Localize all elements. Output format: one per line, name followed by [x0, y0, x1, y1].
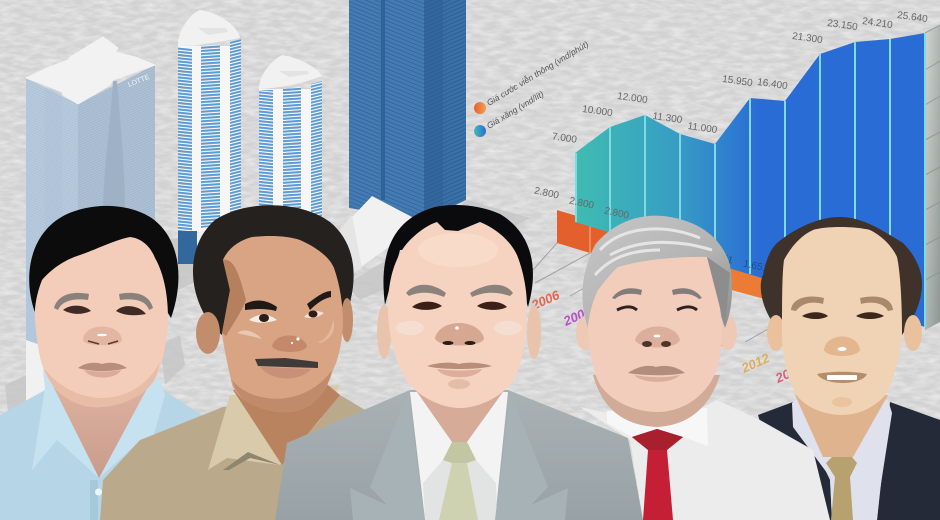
collar [32, 370, 165, 478]
tie [826, 457, 857, 520]
chart year labels: 2012 [738, 350, 772, 376]
chart: petrol price area [575, 33, 925, 327]
eyes [412, 302, 442, 310]
eyes [802, 312, 828, 319]
hair [29, 206, 178, 320]
eyes [617, 307, 637, 310]
person 4: white shirt, red tie [576, 216, 830, 520]
ground shadows of buildings [5, 200, 530, 412]
neck [412, 385, 508, 442]
face [388, 222, 527, 408]
hair [761, 217, 922, 335]
chart value labels: 15.950 [721, 74, 754, 89]
shirt [792, 400, 892, 520]
chart legend: Giá xăng (vnd/lít) [485, 89, 546, 131]
mouth [628, 366, 685, 375]
chart value labels: 2.800 [568, 196, 595, 212]
chart year labels: 2013 [772, 360, 806, 386]
shirt [580, 400, 830, 520]
nose [435, 323, 484, 346]
shirt [410, 392, 508, 520]
neck [593, 375, 720, 427]
building: Lotte tower: LOTTE [127, 74, 151, 89]
face [782, 227, 902, 415]
chart value labels: 1.651 [707, 251, 734, 267]
building: low white podium [26, 340, 60, 402]
chart value labels: 1.651 [742, 259, 769, 275]
chart value labels: 12.000 [616, 91, 649, 106]
chart value labels [533, 10, 929, 275]
hair [582, 216, 732, 328]
chart year labels [528, 287, 806, 386]
ears [576, 316, 594, 350]
chart legend [474, 39, 590, 137]
collar [208, 385, 340, 470]
eyebrows [612, 288, 642, 299]
lapels [350, 392, 425, 520]
eyebrows [54, 293, 89, 310]
shirt [0, 390, 202, 520]
chart value labels: 2.800 [603, 206, 630, 222]
mouth [817, 372, 867, 383]
mouth [78, 363, 127, 371]
hair [383, 205, 533, 307]
face [35, 237, 168, 407]
right-hand floor of chart [925, 25, 940, 330]
building: twin tower right [259, 55, 322, 224]
building: Lotte tower [26, 37, 155, 360]
person 3: grey suit, front [275, 205, 643, 520]
chart value labels: 2.800 [533, 186, 560, 202]
hair [193, 205, 354, 335]
chart value labels: 23.150 [826, 18, 859, 33]
ears [377, 305, 391, 359]
tie [632, 429, 683, 520]
shirt [100, 395, 365, 520]
ears [767, 315, 785, 351]
chart value labels: 24.210 [861, 16, 894, 31]
person 1: light blue shirt [0, 206, 202, 520]
cheeks [396, 321, 424, 335]
chart value labels: 25.640 [896, 10, 929, 25]
person 2: beige shirt [100, 205, 365, 520]
chart legend: Giá cước viễn thông (vnd/phút) [485, 39, 590, 108]
chart value labels: 10.000 [581, 104, 614, 119]
building: blue tower [338, 0, 466, 275]
suit [758, 402, 940, 520]
neck [233, 380, 340, 465]
eyes [63, 306, 91, 314]
mouth [427, 363, 492, 369]
suit [275, 390, 643, 520]
building: twin tower left [178, 10, 241, 264]
nose [83, 326, 122, 345]
cheek highlights [237, 330, 262, 339]
chart: telecom tariff orange area [557, 210, 770, 300]
chart year labels: 2011 [702, 330, 735, 355]
eyebrows [791, 296, 824, 311]
forehead highlight [418, 233, 498, 267]
neck [795, 395, 888, 457]
eyebrows [245, 301, 277, 311]
nose [635, 326, 680, 348]
person 5: dark suit [758, 217, 940, 520]
mouth [260, 367, 311, 379]
nose [824, 336, 860, 356]
chart value labels: 11.300 [652, 111, 683, 126]
ears [196, 312, 220, 354]
chart floor grid lines [533, 25, 940, 342]
nose [272, 336, 307, 352]
neck [45, 370, 157, 478]
chart year labels: 2007 [560, 303, 594, 329]
collar [607, 408, 708, 446]
eyes [249, 315, 277, 323]
jaw shade [232, 370, 332, 412]
jaw shade [44, 362, 160, 407]
face [222, 236, 343, 412]
chart year labels: 2006 [528, 287, 562, 313]
chart value labels: 11.000 [687, 121, 718, 136]
tie [439, 442, 478, 520]
chart value labels: 7.000 [551, 131, 578, 146]
chart value labels: 21.300 [791, 31, 824, 46]
moustache [255, 358, 318, 368]
chart value labels: 16.400 [756, 77, 789, 92]
temple shadow [222, 260, 246, 336]
face [588, 257, 722, 412]
eyebrows [406, 285, 446, 297]
